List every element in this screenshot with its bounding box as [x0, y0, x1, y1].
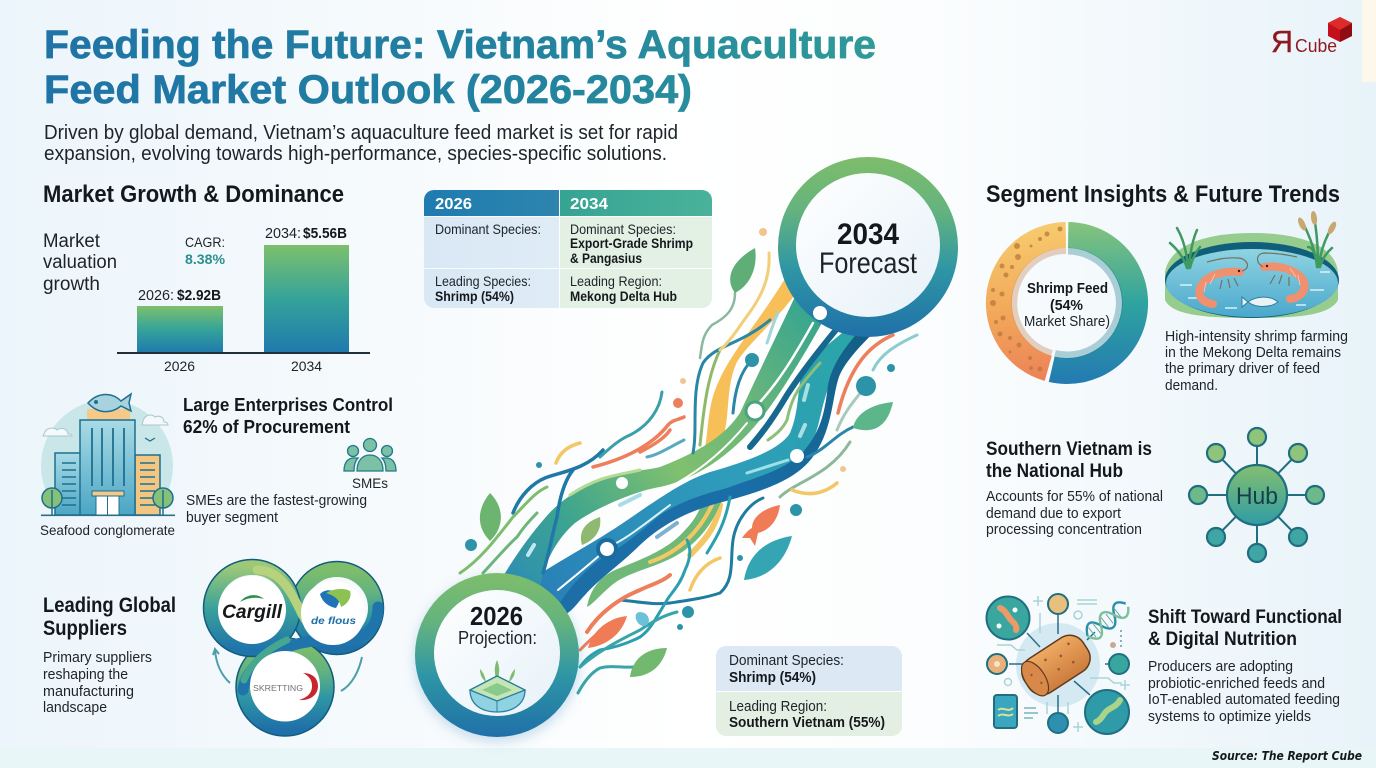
value label 2034: $5.56B	[303, 226, 347, 242]
axis labels	[164, 358, 322, 374]
leaf: small green	[581, 517, 600, 545]
text: shrimp farming	[1165, 329, 1348, 394]
cell: 2034 dominant species: Export-Grade Shrimp	[570, 236, 693, 251]
chart label: Market	[43, 231, 101, 252]
circle: 2026 projection	[415, 573, 579, 737]
value label 2034: 2034:	[265, 226, 301, 242]
chart label: growth	[43, 274, 100, 295]
thin teal lines	[460, 253, 917, 693]
cell: 2034 dominant species: Dominant Species:	[570, 221, 676, 237]
donut chart: shrimp feed share	[986, 222, 1148, 384]
coral strands	[580, 335, 893, 650]
top tan circle	[1048, 594, 1068, 614]
panel: 2026 projection summary	[716, 646, 902, 736]
ring: de flous	[290, 562, 384, 654]
chart label	[43, 231, 117, 295]
text: primary suppliers: reshaping the	[43, 666, 128, 683]
text: SMEs fastest growing: buyer segment	[186, 510, 278, 526]
text: primary suppliers: Primary suppliers	[43, 649, 152, 666]
text: southern Vietnam detail: processing concentration	[986, 522, 1142, 538]
icon: functional nutrition pellet	[986, 594, 1132, 734]
flowing ribbons illustration	[460, 253, 917, 693]
circle: 2034 forecast: Forecast	[819, 247, 918, 280]
row: dominant species: Dominant Species:	[729, 652, 844, 669]
small fish	[1242, 297, 1278, 307]
supplier rings diagram	[204, 560, 384, 736]
spoon shape coral	[588, 616, 627, 648]
text: shrimp farming: High-intensity shrimp farming	[1165, 329, 1348, 345]
icon: coral fish	[742, 505, 780, 546]
highlight lines	[528, 323, 840, 590]
row: dominant species	[716, 646, 902, 691]
text: functional nutrition detail: Producers are adopting	[1148, 659, 1293, 675]
axis labels: 2026	[164, 358, 195, 374]
ribbon: lower green	[587, 490, 725, 607]
heading: leading global suppliers: Suppliers	[43, 617, 127, 640]
logo: de flous: de flous	[311, 616, 357, 627]
logo: Skretting: SKRETTING	[253, 683, 303, 693]
CAGR callout: 8.38%	[185, 251, 226, 267]
logo: de flous	[301, 581, 365, 645]
row: leading region: Leading Region:	[729, 698, 827, 715]
text: SMEs fastest growing: SMEs are the fastest-growing	[186, 493, 367, 509]
bar 2026	[137, 306, 223, 353]
heading: large enterprises	[183, 394, 393, 437]
segment: other 46%	[986, 222, 1066, 381]
cell: 2026 dominant species: Dominant Species:	[435, 221, 541, 237]
subtitle: Driven by global demand, Vietnam’s aquaculture feed market is set for rapid	[44, 122, 678, 144]
text: southern Vietnam detail: Accounts for 55% of national	[986, 489, 1163, 505]
subtitle	[44, 122, 678, 165]
ring: Skretting	[236, 638, 334, 736]
bacteria circle top left	[986, 596, 1030, 640]
heading: southern Vietnam	[986, 439, 1152, 482]
title: Feed Market Outlook (2026-2034)	[44, 68, 692, 112]
logo: Cargill: Cargill	[222, 602, 283, 623]
heading: southern Vietnam: the National Hub	[986, 461, 1123, 482]
heading: leading global suppliers	[43, 594, 176, 640]
circle: 2034 forecast: 2034	[837, 218, 899, 251]
comparison table	[424, 190, 712, 308]
CAGR callout: CAGR:	[185, 234, 225, 250]
ring: Cargill	[204, 560, 300, 656]
segment: shrimp feed 54%	[1049, 222, 1148, 384]
pellet	[1016, 629, 1096, 701]
text: functional nutrition detail: IoT-enabled automated feeding	[1148, 692, 1340, 708]
source note: Source: The Report Cube	[1212, 749, 1362, 763]
logo: RCube	[1271, 17, 1352, 59]
cell: 2026 dominant species	[424, 217, 559, 268]
text: primary suppliers: manufacturing	[43, 683, 134, 700]
cell: 2026 leading species: Leading Species:	[435, 273, 531, 289]
header: 2034	[560, 190, 712, 216]
text: shrimp farming: in the Mekong Delta remains	[1165, 345, 1341, 361]
value label 2034	[265, 226, 347, 242]
ribbon: green	[495, 290, 840, 595]
leaf: right	[853, 402, 893, 430]
leaf: left	[480, 493, 501, 541]
heading: functional and digital nutrition: Shift Toward Functional	[1148, 607, 1342, 628]
leaf: upper	[730, 248, 756, 293]
circle: 2026 projection: Projection:	[458, 628, 537, 648]
header: 2026: 2026	[435, 196, 472, 213]
cell: 2034 dominant species: & Pangasius	[570, 251, 642, 266]
cell: 2026 leading species: Shrimp (54%)	[435, 289, 514, 304]
teal strand upper	[600, 392, 662, 457]
logo: RCube: Я	[1271, 24, 1293, 59]
label: SMEs: SMEs	[352, 475, 388, 491]
blue drop	[636, 612, 649, 626]
text: primary suppliers: landscape	[43, 699, 107, 716]
donut label: Market Share)	[1024, 314, 1110, 330]
ribbon: yellow	[690, 270, 812, 555]
heading: market growth and dominance: Market Growth & Dominance	[43, 181, 344, 208]
donut label	[1024, 281, 1110, 330]
icon: hub network	[1189, 428, 1324, 562]
swoosh connecting rings	[243, 570, 378, 690]
leaf: lower	[630, 648, 667, 677]
row: dominant species: Shrimp (54%)	[729, 669, 816, 686]
text: primary suppliers	[43, 649, 152, 716]
row: leading region: Southern Vietnam (55%)	[729, 714, 885, 731]
icon: pond	[470, 660, 525, 712]
value label 2026: 2026:	[138, 288, 174, 304]
cell: 2034 leading region: Leading Region:	[570, 273, 662, 289]
text: southern Vietnam detail: demand due to export	[986, 506, 1121, 522]
cell: 2026 leading species	[424, 269, 559, 308]
value label 2026	[138, 288, 221, 304]
arrows	[213, 649, 362, 691]
heading: southern Vietnam: Southern Vietnam is	[986, 439, 1152, 460]
text: southern Vietnam detail	[986, 489, 1163, 538]
header: 2026	[424, 190, 559, 216]
row: leading region	[716, 692, 902, 736]
cell: 2034 leading region: Mekong Delta Hub	[570, 289, 677, 304]
bar chart: market valuation growth	[43, 226, 370, 374]
title: Feeding the Future: Vietnam’s Aquaculture	[44, 23, 876, 67]
icon: shrimp pond	[1165, 211, 1339, 318]
CAGR callout	[185, 234, 226, 267]
circle: 2034 forecast	[778, 157, 958, 337]
text: functional nutrition detail: systems to optimize yields	[1148, 709, 1311, 725]
yellow strands	[556, 443, 837, 590]
text: functional nutrition detail	[1148, 659, 1340, 725]
text: shrimp farming: demand.	[1165, 378, 1218, 394]
plants	[1170, 217, 1332, 268]
text: functional nutrition detail: probiotic-enriched feeds and	[1148, 676, 1325, 692]
shrimp right	[1257, 253, 1305, 299]
value label 2026: $2.92B	[177, 288, 221, 304]
chart label: valuation	[43, 252, 117, 273]
DNA	[1082, 598, 1132, 643]
axis labels: 2034	[291, 358, 322, 374]
icon: seafood conglomerate building	[41, 394, 175, 516]
ribbon: teal	[518, 318, 875, 620]
heading: leading global suppliers: Leading Global	[43, 594, 176, 617]
bar 2034	[264, 245, 349, 353]
bacteria circle bottom right	[1085, 690, 1129, 734]
logo: Skretting	[250, 651, 320, 721]
decorative leaves, fish and dots	[465, 228, 895, 677]
heading: large enterprises: 62% of Procurement	[183, 416, 350, 437]
logo: Cargill	[218, 576, 286, 644]
circle: 2026 projection: 2026	[470, 601, 523, 631]
donut label: (54%	[1050, 298, 1083, 314]
ribbon: dark blue	[552, 322, 885, 616]
text: shrimp farming: the primary driver of feed	[1165, 361, 1320, 377]
cell: 2034 leading region	[560, 269, 712, 308]
shrimp left	[1199, 258, 1248, 304]
donut label: Shrimp Feed	[1027, 281, 1108, 297]
icon: hub network: Hub	[1236, 483, 1278, 510]
phone	[994, 695, 1017, 728]
text: SMEs fastest growing	[186, 493, 367, 526]
heading: segment insights: Segment Insights & Future Trends	[986, 181, 1340, 208]
heading: large enterprises: Large Enterprises Control	[183, 394, 393, 415]
heading: functional and digital nutrition: & Digital Nutrition	[1148, 629, 1297, 650]
flow nodes	[598, 402, 804, 558]
icon: SMEs people	[344, 438, 396, 471]
cell: 2034 dominant species	[560, 217, 712, 268]
subtitle: expansion, evolving towards high-performance, species-specific solutions.	[44, 143, 667, 165]
header: 2034: 2034	[570, 196, 608, 213]
leaf: teal	[744, 536, 792, 580]
title	[44, 23, 876, 112]
logo: RCube: Cube	[1295, 36, 1337, 56]
label: seafood conglomerate: Seafood conglomerate	[40, 522, 175, 538]
heading: functional and digital nutrition	[1148, 607, 1342, 650]
